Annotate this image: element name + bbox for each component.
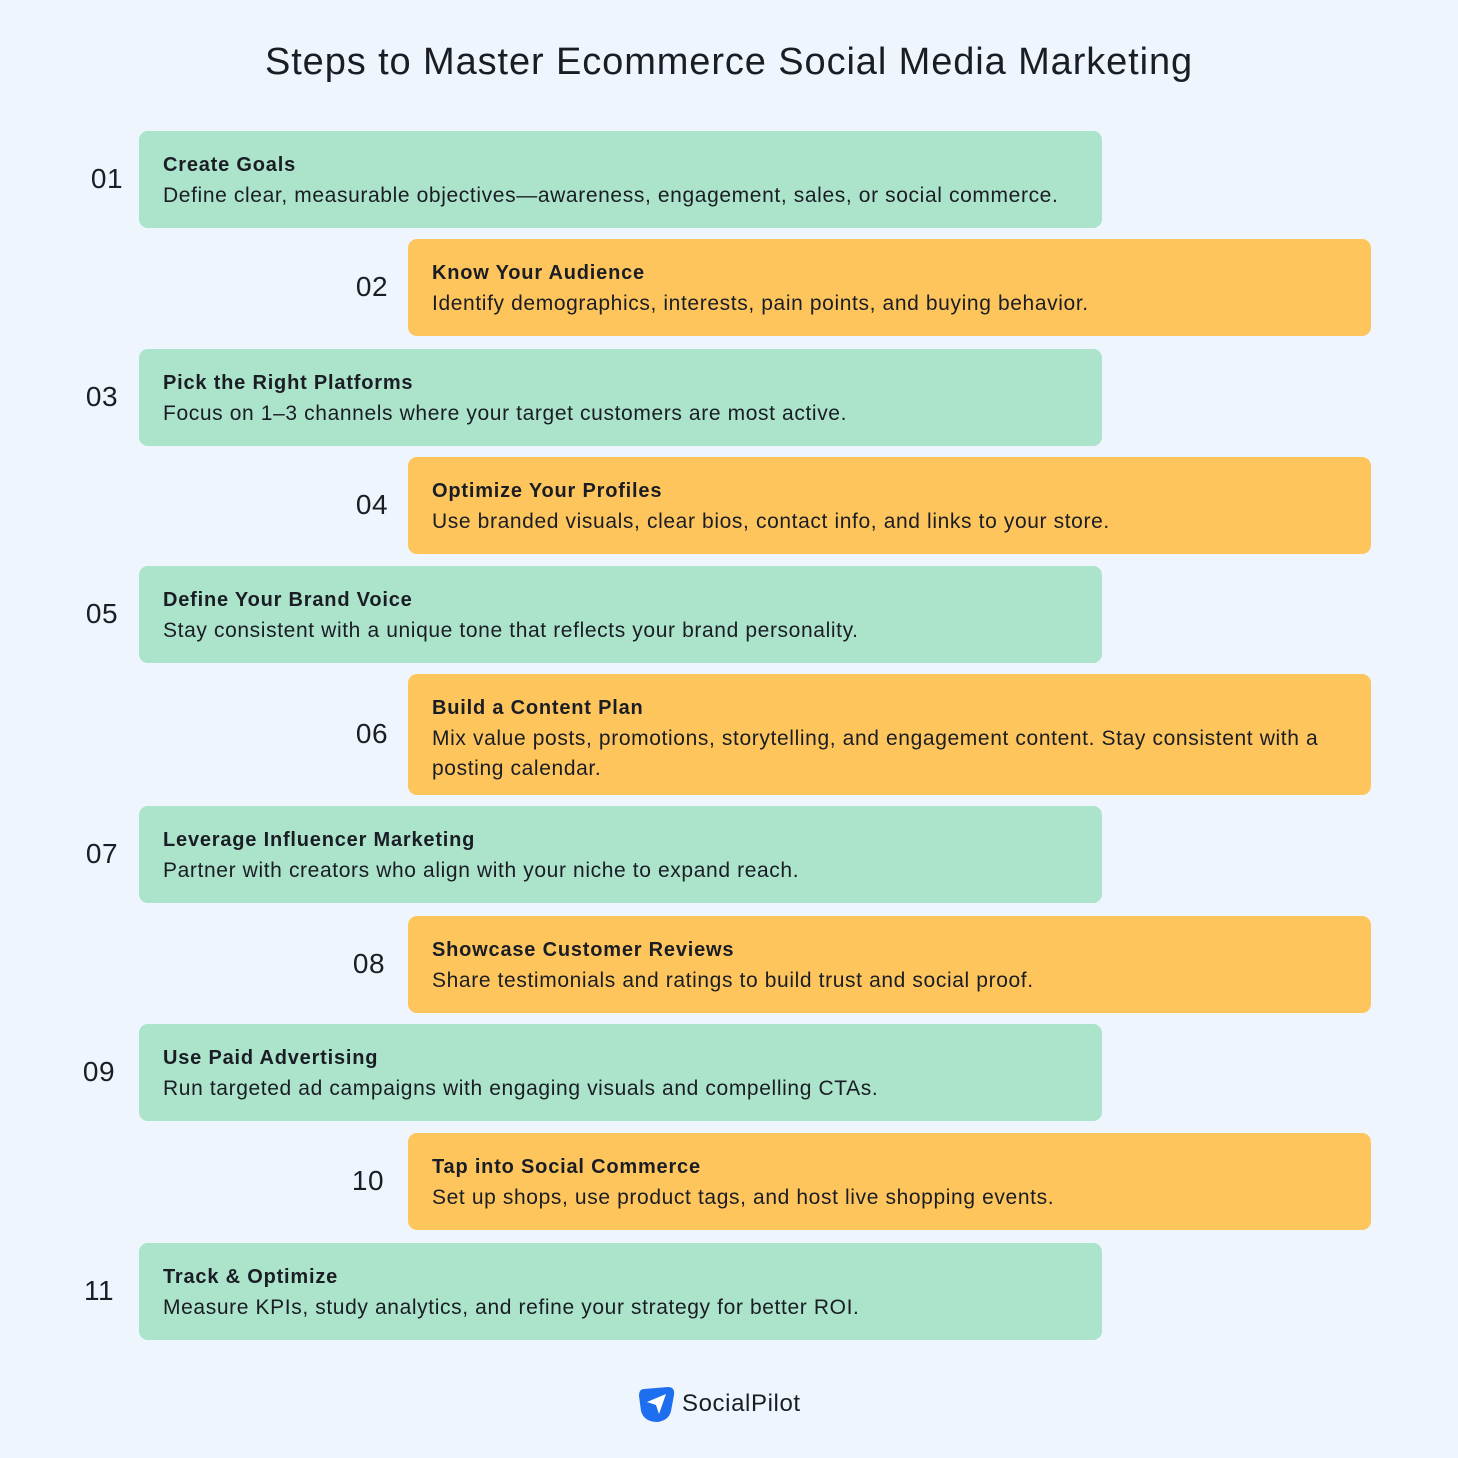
step 10 card: Tap into Social Commerce [432,1156,701,1178]
logo: SocialPilot [639,1387,801,1422]
step number 10: 10 [352,1165,384,1196]
title: Steps to Master Ecommerce Social Media Marketing [265,41,1193,83]
step 03 card: Focus on 1–3 channels where your target customers are most active. [163,402,847,425]
step 11 card: Track & Optimize [163,1266,338,1288]
step 02 card [408,239,1371,336]
step 04 card [408,457,1371,554]
logo text: SocialPilot [682,1390,801,1417]
step 05 card [139,566,1102,663]
step 03 card: Pick the Right Platforms [163,372,413,394]
step 02 card: Identify demographics, interests, pain points, and buying behavior. [432,292,1089,315]
step 04 card: Use branded visuals, clear bios, contact info, and links to your store. [432,510,1110,533]
icon: paper plane shield [639,1387,674,1422]
step 02 card: Know Your Audience [432,262,645,284]
step 05 card: Stay consistent with a unique tone that reflects your brand personality. [163,619,859,642]
step 09 card: Use Paid Advertising [163,1047,378,1069]
step 09 card: Run targeted ad campaigns with engaging visuals and compelling CTAs. [163,1077,878,1100]
step 08 card [408,916,1371,1013]
step number 02: 02 [356,271,388,302]
step 11 card: Measure KPIs, study analytics, and refine your strategy for better ROI. [163,1296,859,1319]
step 05 card: Define Your Brand Voice [163,589,413,611]
step 07 card [139,806,1102,903]
step number 11: 11 [84,1275,114,1306]
step 08 card: Showcase Customer Reviews [432,939,734,961]
step number 03: 03 [86,381,118,412]
step 10 card: Set up shops, use product tags, and host live shopping events. [432,1186,1054,1209]
step number 01: 01 [91,163,123,194]
step number 04: 04 [356,489,388,520]
step 08 card: Share testimonials and ratings to build trust and social proof. [432,969,1034,992]
step 10 card [408,1133,1371,1230]
step 03 card [139,349,1102,446]
step number 08: 08 [353,948,385,979]
step 06 card: Build a Content Plan [432,697,644,719]
step 01 card: Define clear, measurable objectives—awareness, engagement, sales, or social commerce. [163,184,1058,207]
step 01 card [139,131,1102,228]
step 07 card: Partner with creators who align with your niche to expand reach. [163,859,799,882]
step number 07: 07 [86,838,118,869]
step 06 card: Mix value posts, promotions, storytelling, and engagement content. Stay consistent with a [432,727,1318,750]
step number 09: 09 [83,1056,115,1087]
step 01 card: Create Goals [163,154,296,176]
step number 05: 05 [86,598,118,629]
step 06 card: posting calendar. [432,757,601,780]
step 07 card: Leverage Influencer Marketing [163,829,475,851]
step 06 card [408,674,1371,795]
step number 06: 06 [356,718,388,749]
step 04 card: Optimize Your Profiles [432,480,662,502]
step 11 card [139,1243,1102,1340]
step 09 card [139,1024,1102,1121]
